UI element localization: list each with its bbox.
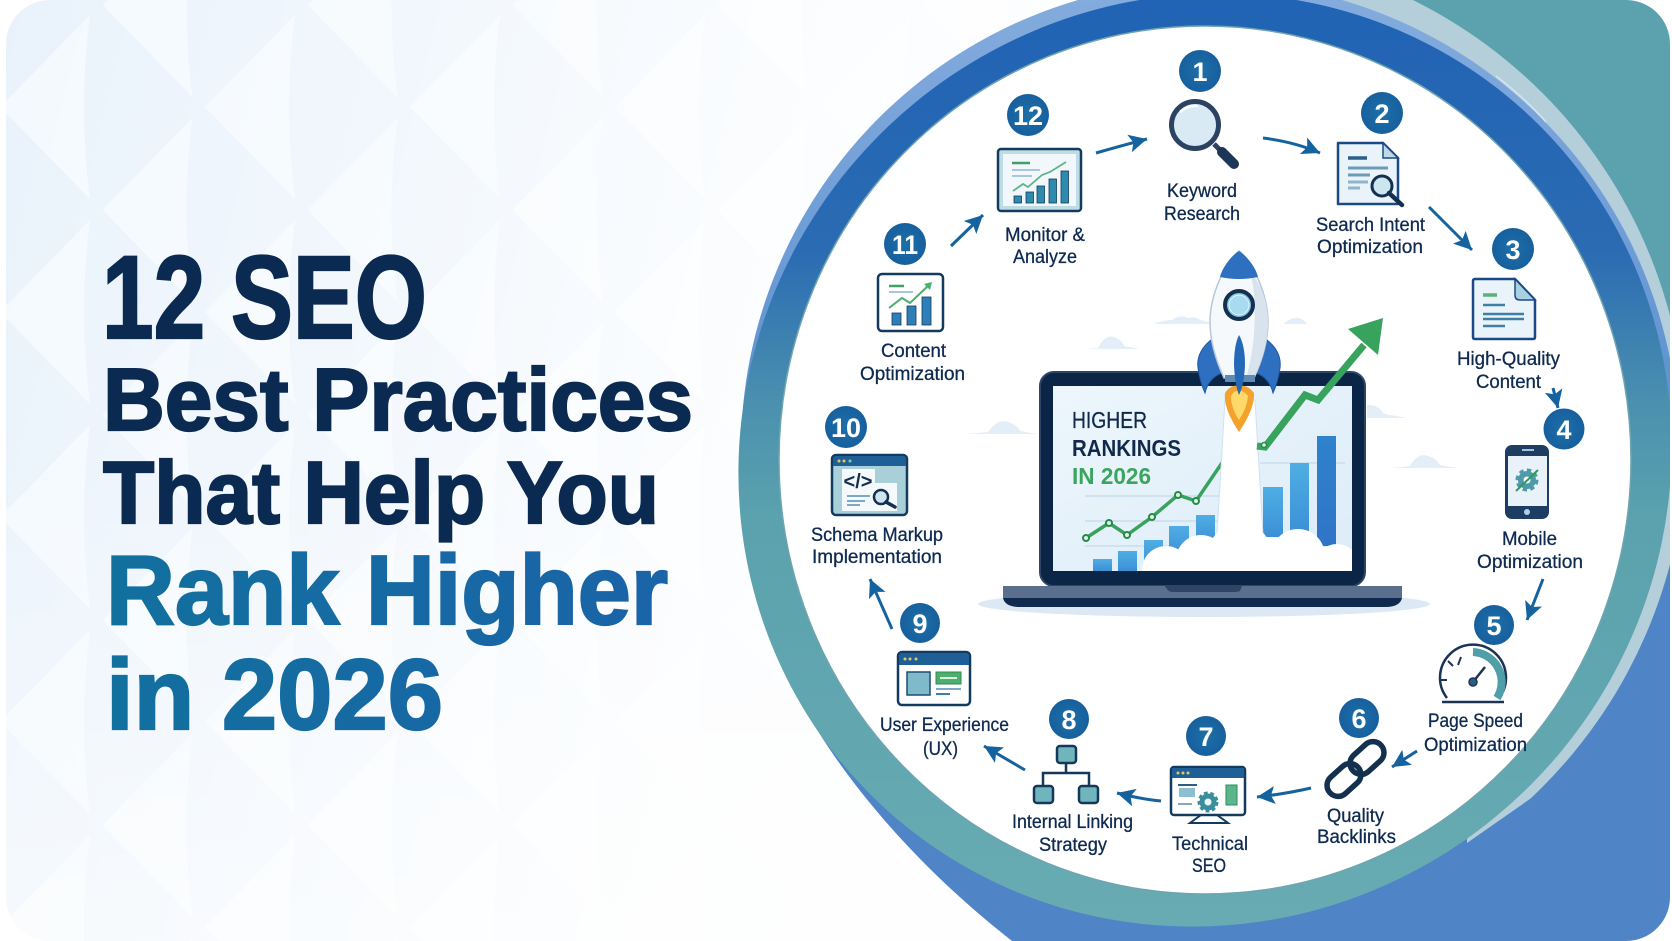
chart bars xyxy=(1093,436,1336,571)
label: Search Intent xyxy=(1316,214,1426,236)
label: Internal Linking xyxy=(1012,811,1133,833)
icon: document with magnifier xyxy=(1338,143,1402,205)
label: Optimization xyxy=(1477,551,1583,573)
label xyxy=(1316,214,1426,258)
step 2: Search Intent Optimization xyxy=(1316,92,1426,258)
icon: browser window xyxy=(898,652,970,705)
title line 1: 12 SEO xyxy=(102,232,427,364)
badge 1 xyxy=(1179,50,1221,92)
badge 9 xyxy=(900,603,940,643)
step 10: Schema Markup Implementation xyxy=(811,406,943,568)
laptop screen xyxy=(1053,386,1352,571)
icon: site hierarchy xyxy=(1034,746,1098,803)
chart line xyxy=(1083,457,1226,541)
background clouds xyxy=(967,316,1457,468)
label: Optimization xyxy=(1317,236,1423,258)
icon: content chart xyxy=(878,274,943,331)
rocket body shading xyxy=(1246,272,1268,378)
label: Keyword xyxy=(1167,180,1237,202)
smoke xyxy=(1142,400,1352,571)
badge 2: 2 xyxy=(1374,99,1390,129)
label xyxy=(1172,833,1248,877)
badge 6 xyxy=(1339,698,1379,738)
step 11: Content Optimization xyxy=(860,223,965,385)
step 12: Monitor & Analyze xyxy=(998,94,1085,268)
step 3: High-Quality Content xyxy=(1457,228,1560,393)
screen text line 1: HIGHER xyxy=(1072,407,1147,433)
flame xyxy=(1225,386,1254,432)
label: Implementation xyxy=(812,546,942,568)
label xyxy=(1317,805,1396,848)
icon: speedometer xyxy=(1440,645,1506,702)
step 1: Keyword Research xyxy=(1164,50,1240,225)
ring: main gradient band xyxy=(738,0,1672,927)
step 7: Technical SEO xyxy=(1171,716,1248,877)
label: Backlinks xyxy=(1317,826,1396,848)
label: User Experience xyxy=(880,714,1009,736)
badge 12 xyxy=(1007,94,1049,136)
centre fin xyxy=(1234,335,1245,395)
label: Optimization xyxy=(1424,734,1527,756)
step 5: Page Speed Optimization xyxy=(1424,605,1527,756)
badge 4: 4 xyxy=(1556,415,1572,445)
ring: pale outer band xyxy=(1342,0,1670,843)
laptop bezel xyxy=(1040,372,1365,586)
badge 3 xyxy=(1492,228,1534,270)
label xyxy=(811,524,943,568)
label xyxy=(1164,180,1240,225)
icon: code window xyxy=(832,455,907,515)
step 8: Internal Linking Strategy xyxy=(1012,699,1133,856)
badge 3: 3 xyxy=(1505,235,1521,265)
label: Research xyxy=(1164,203,1240,225)
label xyxy=(1424,710,1527,756)
badge 8: 8 xyxy=(1061,705,1077,735)
label: Analyze xyxy=(1013,246,1077,268)
label: Page Speed xyxy=(1428,710,1523,732)
badge 9: 9 xyxy=(912,609,928,639)
badge 2 xyxy=(1361,92,1403,134)
badge 7: 7 xyxy=(1198,722,1214,752)
label: SEO xyxy=(1192,855,1226,877)
icon: smartphone xyxy=(1505,445,1549,519)
title line 4: Rank Higher xyxy=(106,535,668,645)
screen text line 2: RANKINGS xyxy=(1072,435,1181,461)
ring: highlight xyxy=(1496,76,1546,122)
label: (UX) xyxy=(923,738,958,760)
process flow arrows xyxy=(870,138,1558,801)
icon: code window: </> xyxy=(844,471,872,493)
badge 11: 11 xyxy=(892,230,918,260)
label: Content xyxy=(1476,371,1542,393)
label: Monitor & xyxy=(1005,224,1085,246)
rocket body xyxy=(1210,251,1268,378)
rocket nozzle xyxy=(1225,375,1255,382)
rocket xyxy=(1198,251,1280,432)
circle: white centre xyxy=(779,26,1631,894)
laptop shadow xyxy=(978,591,1430,617)
label: High-Quality xyxy=(1457,348,1560,370)
label xyxy=(1457,348,1560,393)
screen text line 3: IN 2026 xyxy=(1072,463,1151,489)
hero: laptop and rocket xyxy=(967,251,1457,617)
title xyxy=(102,232,693,751)
badge 11 xyxy=(884,223,926,265)
label: Strategy xyxy=(1039,834,1107,856)
label: Quality xyxy=(1327,805,1384,827)
laptop base xyxy=(1003,586,1402,607)
step 6: Quality Backlinks xyxy=(1317,698,1396,848)
rocket window xyxy=(1225,291,1253,319)
badge 10: 10 xyxy=(831,413,861,443)
label xyxy=(1477,528,1583,573)
badge 4 xyxy=(1544,408,1584,450)
icon: magnifying glass xyxy=(1172,102,1234,164)
badge 12: 12 xyxy=(1013,101,1043,131)
label: Schema Markup xyxy=(811,524,943,546)
title line 3: That Help You xyxy=(103,443,659,542)
title line 5: in 2026 xyxy=(106,639,443,751)
badge 7 xyxy=(1186,716,1226,756)
ring: light blue band xyxy=(742,0,1670,415)
label xyxy=(1005,224,1085,268)
rocket fins xyxy=(1198,340,1280,393)
chart grid xyxy=(1085,463,1345,546)
screen contents xyxy=(1082,400,1352,571)
icon: monitor with gear xyxy=(1171,767,1245,823)
corner: teal top right xyxy=(1413,0,1670,316)
title line 2: Best Practices xyxy=(103,350,693,449)
icon: chain link xyxy=(1323,737,1388,801)
badge 5 xyxy=(1474,605,1514,645)
green growth arrow xyxy=(1257,318,1383,448)
rocket nose xyxy=(1220,251,1258,279)
icon: analytics dashboard xyxy=(998,149,1081,211)
label: Optimization xyxy=(860,363,965,385)
badge 8 xyxy=(1049,699,1089,739)
label: Content xyxy=(881,340,947,362)
badge 6: 6 xyxy=(1351,704,1367,734)
label: Technical xyxy=(1172,833,1248,855)
label: Mobile xyxy=(1502,528,1557,550)
higher rankings text xyxy=(1072,407,1181,489)
badge 10 xyxy=(825,406,867,448)
label xyxy=(860,340,965,385)
badge 1: 1 xyxy=(1192,57,1208,87)
corner: blue bottom with crescent xyxy=(816,564,1670,941)
badge 5: 5 xyxy=(1486,611,1502,641)
icon: document xyxy=(1473,279,1535,339)
step 9: User Experience (UX) xyxy=(880,603,1009,760)
label xyxy=(880,714,1009,760)
label xyxy=(1012,811,1133,856)
step 4: Mobile Optimization xyxy=(1477,408,1584,573)
